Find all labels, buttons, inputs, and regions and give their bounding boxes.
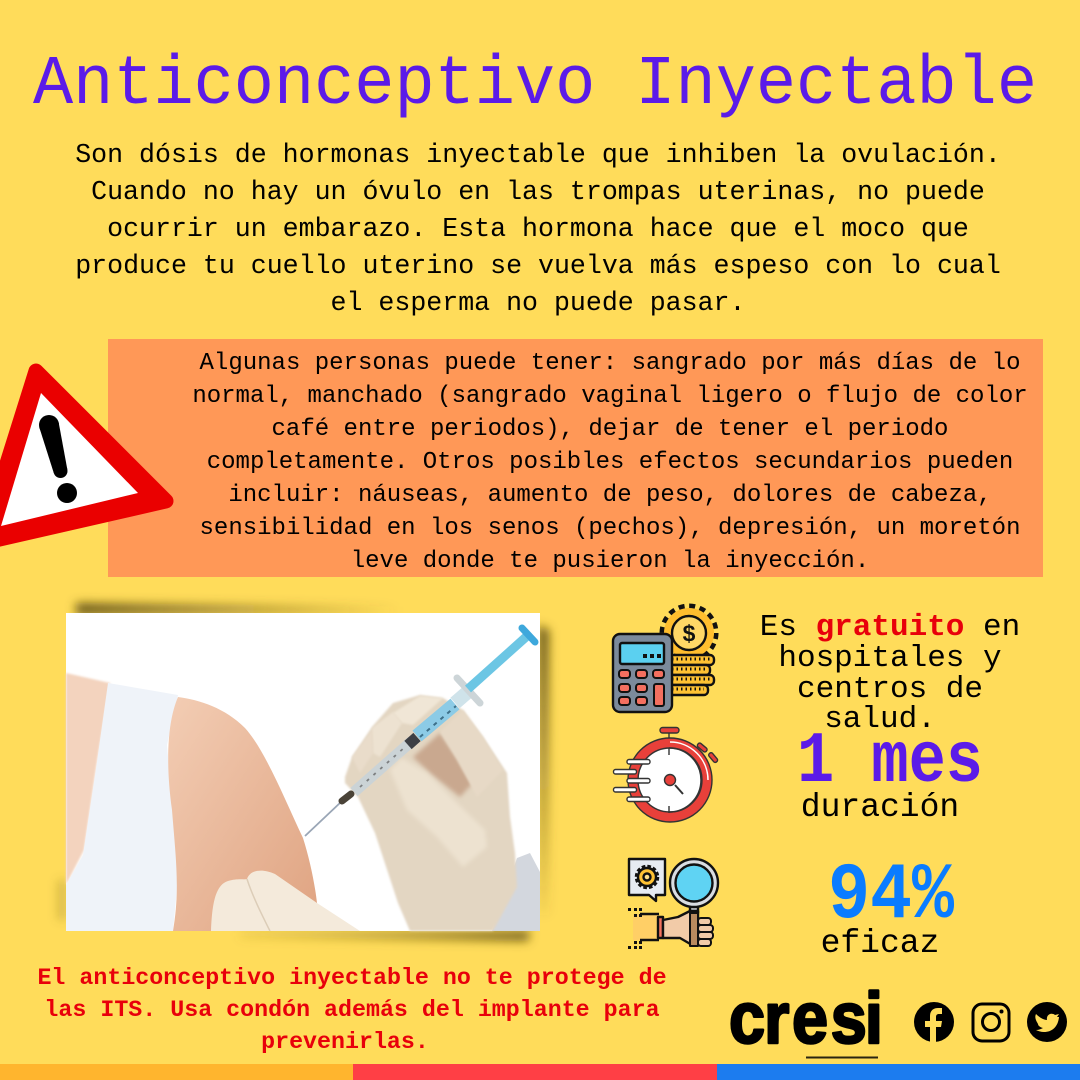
intro paragraph: [75, 140, 1001, 318]
sleeve: [633, 914, 659, 940]
cost text: [760, 610, 1020, 737]
efficacy stat: eficaz: [821, 925, 939, 962]
speech bubble: [629, 859, 665, 901]
cost text: Es gratuito en: [760, 610, 1020, 645]
cost text: hospitales y: [778, 641, 1002, 676]
cost text: centros de: [797, 672, 983, 707]
warning note: STI protection: El anticonceptivo inyectable no te protege de: [37, 965, 667, 991]
upper fingers: [393, 696, 443, 725]
footer colour bar: [0, 1064, 1080, 1080]
side effects text: normal, manchado (sangrado vaginal ligero o flujo de color: [192, 383, 1028, 410]
needle: [305, 802, 341, 836]
icon: instagram: [973, 1004, 1009, 1041]
gear: [662, 606, 716, 660]
gap between fingers: [413, 733, 473, 797]
magnifier: [690, 906, 698, 913]
title: Anticonceptivo Inyectable: [33, 46, 1037, 125]
hand: [663, 911, 698, 945]
syringe finger flange: [457, 678, 480, 703]
warning note: STI protection: las ITS. Usa condón además del implante para: [44, 997, 660, 1023]
side effects text: café entre periodos), dejar de tener el periodo: [272, 416, 948, 443]
lower gloved hand: [211, 871, 360, 931]
duration stat: 1 mes: [797, 721, 983, 803]
image shadow: [58, 603, 549, 941]
icon: hand with magnifier: [628, 859, 718, 949]
arm: [168, 697, 317, 931]
side effects text: incluir: náuseas, aumento de peso, dolores de cabeza,: [228, 482, 992, 509]
panel: side effects: [108, 339, 1043, 577]
warning note: STI protection: [37, 965, 667, 1055]
cuff: [658, 917, 663, 938]
syringe plunger: [468, 637, 526, 689]
icon: stopwatch: [614, 728, 718, 822]
tank top strap: [66, 683, 178, 931]
intro paragraph: el esperma no puede pasar.: [331, 288, 745, 318]
efficacy stat: 94%: [828, 851, 955, 942]
icon: calculator and coins: [613, 606, 716, 712]
side effects text: sensibilidad en los senos (pechos), depresión, un moretón: [200, 515, 1020, 542]
icon: calculator and coins: $: [682, 622, 696, 648]
warning note: STI protection: prevenirlas.: [261, 1029, 429, 1055]
intro paragraph: Son dósis de hormonas inyectable que inhiben la ovulación.: [75, 140, 1001, 170]
icon: facebook: [914, 1002, 954, 1042]
logo: cresi: cresi: [729, 978, 883, 1059]
photo: injection in the arm: [66, 613, 540, 931]
side effects text: Algunas personas puede tener: sangrado por más días de lo: [200, 350, 1020, 377]
duration stat: [797, 721, 983, 826]
side effects text: leve donde te pusieron la inyección.: [351, 548, 869, 575]
syringe hub: [342, 794, 351, 801]
intro paragraph: Cuando no hay un óvulo en las trompas uterinas, no puede: [91, 177, 985, 207]
icon: warning triangle: [0, 371, 166, 543]
cost text: salud.: [824, 702, 936, 737]
doctor sleeve: [492, 853, 540, 931]
duration stat: duración: [801, 789, 959, 826]
syringe barrel: [354, 741, 412, 792]
thumb: [390, 758, 487, 867]
side effects text: [192, 350, 1028, 575]
calculator body: [613, 634, 672, 712]
intro paragraph: produce tu cuello uterino se vuelva más espeso con lo cual: [75, 251, 1001, 281]
intro paragraph: ocurrir un embarazo. Esta hormona hace que el moco que: [107, 214, 969, 244]
icon: twitter: [1027, 1002, 1067, 1042]
side effects text: completamente. Otros posibles efectos secundarios pueden: [207, 449, 1013, 476]
coins: [668, 655, 714, 695]
skin chest: [66, 673, 110, 885]
right glove: [345, 695, 517, 931]
